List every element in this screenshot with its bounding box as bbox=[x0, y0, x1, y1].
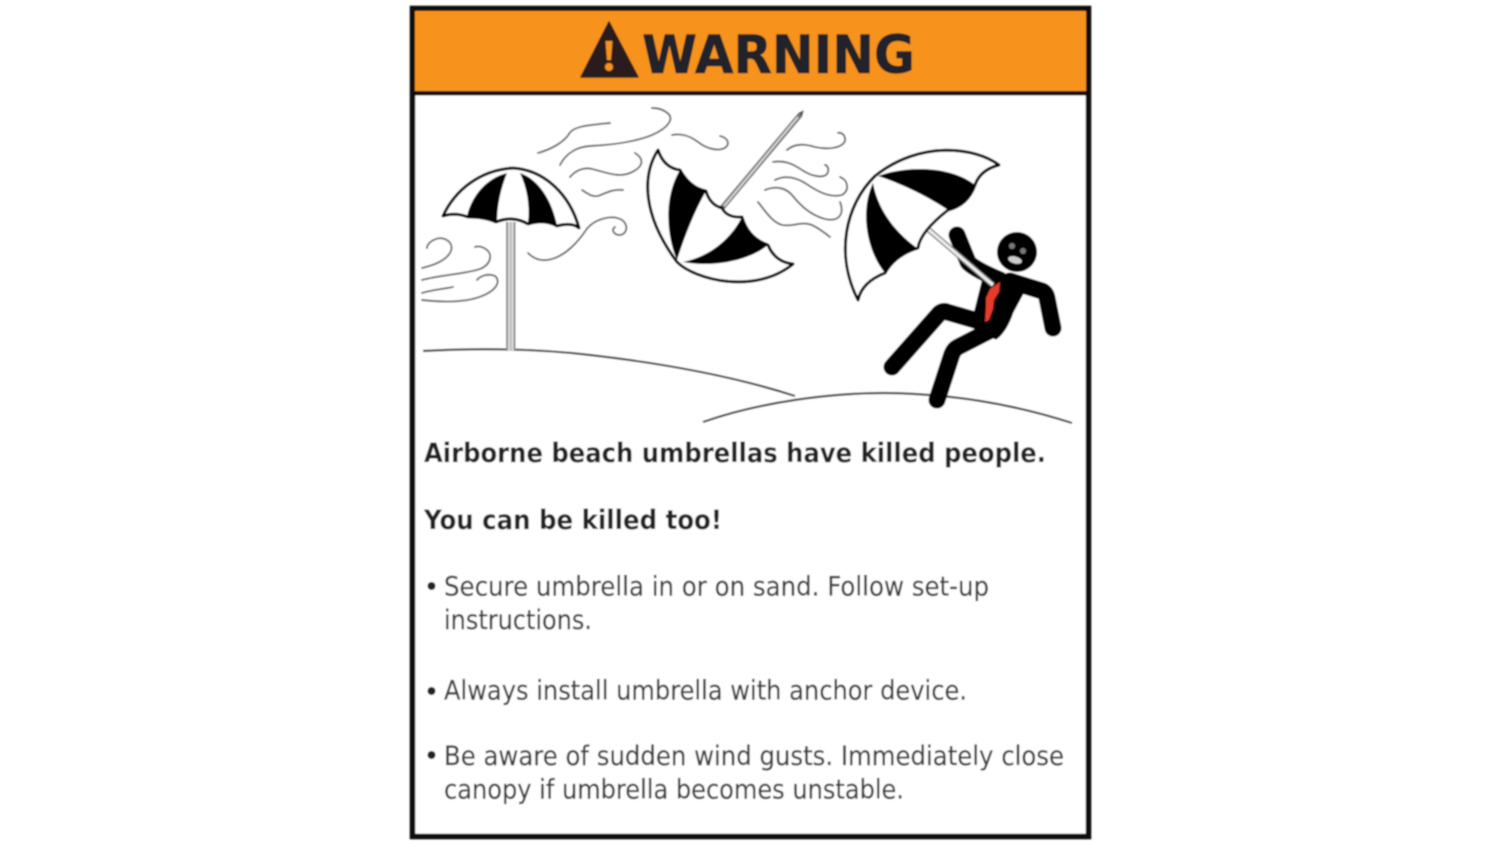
bullet 3: canopy if umbrella becomes unstable. bbox=[444, 774, 904, 806]
arms bbox=[957, 235, 1000, 280]
umbrella: airborne bbox=[648, 110, 804, 282]
heading: WARNING: WARNING bbox=[642, 25, 915, 86]
pole bbox=[506, 222, 516, 351]
bullet 3: Be aware of sudden wind gusts. Immediately close bbox=[444, 741, 1064, 772]
hill right bbox=[703, 393, 1072, 423]
umbrella: standing bbox=[443, 168, 579, 351]
canopy bbox=[845, 150, 999, 300]
bullet 1: Secure umbrella in or on sand. Follow set-up bbox=[444, 572, 989, 602]
head bbox=[997, 232, 1037, 272]
bullet 3 bbox=[428, 741, 1064, 806]
warning line 2: You can be killed too! bbox=[423, 505, 722, 536]
blood bbox=[985, 282, 1000, 322]
bullet 1 bbox=[428, 572, 989, 636]
header band bbox=[415, 11, 1086, 96]
face bbox=[1007, 243, 1026, 265]
text block: warnings bbox=[423, 438, 1046, 536]
stick figure bbox=[892, 230, 1053, 400]
canopy bbox=[648, 150, 793, 282]
shaft bbox=[722, 115, 800, 208]
bullet 1: instructions. bbox=[444, 605, 592, 636]
icon: warning triangle bbox=[581, 22, 638, 77]
warning line 1: Airborne beach umbrellas have killed people. bbox=[424, 438, 1046, 469]
bullet 2: Always install umbrella with anchor device. bbox=[444, 676, 967, 706]
umbrella shaft piercing chest bbox=[929, 230, 993, 285]
wind lines bbox=[422, 108, 847, 301]
torso bbox=[972, 274, 1026, 338]
illustration: beach scene bbox=[422, 108, 1072, 423]
legs bbox=[892, 311, 985, 367]
sign panel frame bbox=[412, 8, 1088, 836]
umbrella: held by person bbox=[845, 150, 999, 300]
hill left bbox=[423, 349, 795, 396]
instruction list bbox=[428, 572, 1064, 806]
canopy bbox=[443, 168, 579, 228]
